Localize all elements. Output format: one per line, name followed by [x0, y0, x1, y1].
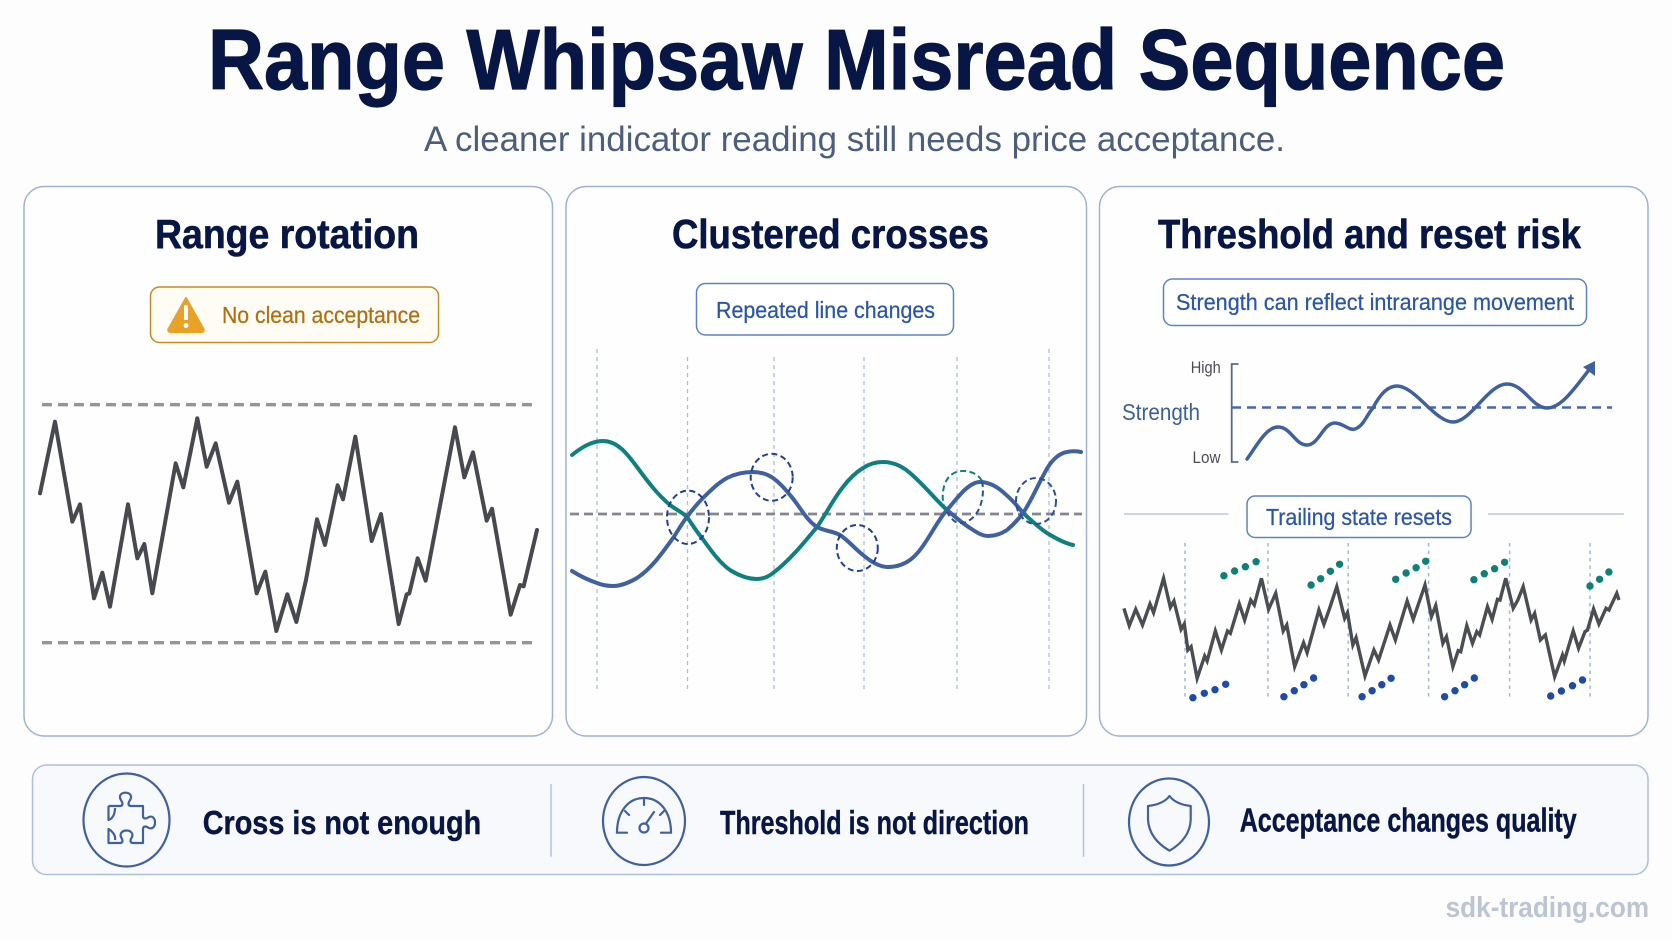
takeaway text: acceptance: Acceptance changes quality [1240, 802, 1577, 839]
axis labels: High [1191, 358, 1221, 377]
teal trailing dots [1220, 558, 1613, 590]
callout: no clean acceptance [150, 287, 438, 342]
blue trailing dots [1189, 674, 1586, 701]
price line: resets [1124, 578, 1619, 678]
takeaway text: threshold: Threshold is not direction [720, 804, 1029, 841]
callout: strength can reflect intrarange movement [1164, 279, 1586, 326]
vertical cross markers [597, 349, 1049, 689]
range boundary upper [42, 403, 532, 406]
axis bracket [1232, 364, 1238, 462]
price line: range rotation [40, 418, 537, 631]
panel: threshold and reset risk [1100, 186, 1648, 736]
callout text: No clean acceptance [222, 302, 420, 328]
subtitle: A cleaner indicator reading still needs price acceptance. [424, 120, 1285, 159]
icon: gauge [603, 777, 685, 865]
lower arc rising line [947, 451, 1081, 536]
callout: repeated line changes: Repeated line changes [716, 297, 935, 323]
panel: clustered crosses [566, 186, 1086, 736]
icon: warning triangle [168, 298, 204, 332]
heading: threshold and reset risk: Threshold and reset risk [1158, 211, 1581, 257]
callout: repeated line changes [696, 284, 954, 335]
heading: clustered crosses: Clustered crosses [672, 211, 989, 257]
strength curve [1247, 370, 1589, 459]
axis labels: Low [1192, 448, 1221, 467]
takeaway text: cross: Cross is not enough [203, 804, 481, 841]
takeaway bar [32, 765, 1648, 874]
title: Range Whipsaw Misread Sequence [208, 13, 1505, 108]
chart: strength [1122, 358, 1612, 467]
callout: strength can reflect intrarange movement: Strength can reflect intrarange movement [1176, 289, 1575, 315]
icon: puzzle piece [84, 774, 170, 866]
callout: trailing state resets: Trailing state resets [1266, 504, 1452, 530]
blue to teal continuation [1023, 513, 1073, 545]
axis labels: Strength [1122, 399, 1200, 425]
reset markers [1185, 543, 1590, 699]
cross circles [667, 454, 1056, 571]
chart: trailing state resets [1124, 543, 1619, 701]
teal line [572, 441, 947, 579]
panel: range rotation [24, 186, 552, 736]
blue line [572, 472, 1023, 586]
range boundary lower [42, 641, 532, 644]
arrow head [1583, 361, 1595, 376]
midline [570, 513, 1082, 515]
axis labels [1122, 358, 1221, 467]
watermark: sdk-trading.com [1446, 892, 1649, 924]
heading: range rotation: Range rotation [155, 211, 419, 257]
threshold line [1232, 406, 1612, 409]
callout: trailing state resets [1124, 496, 1624, 538]
icon: shield [1129, 778, 1209, 866]
